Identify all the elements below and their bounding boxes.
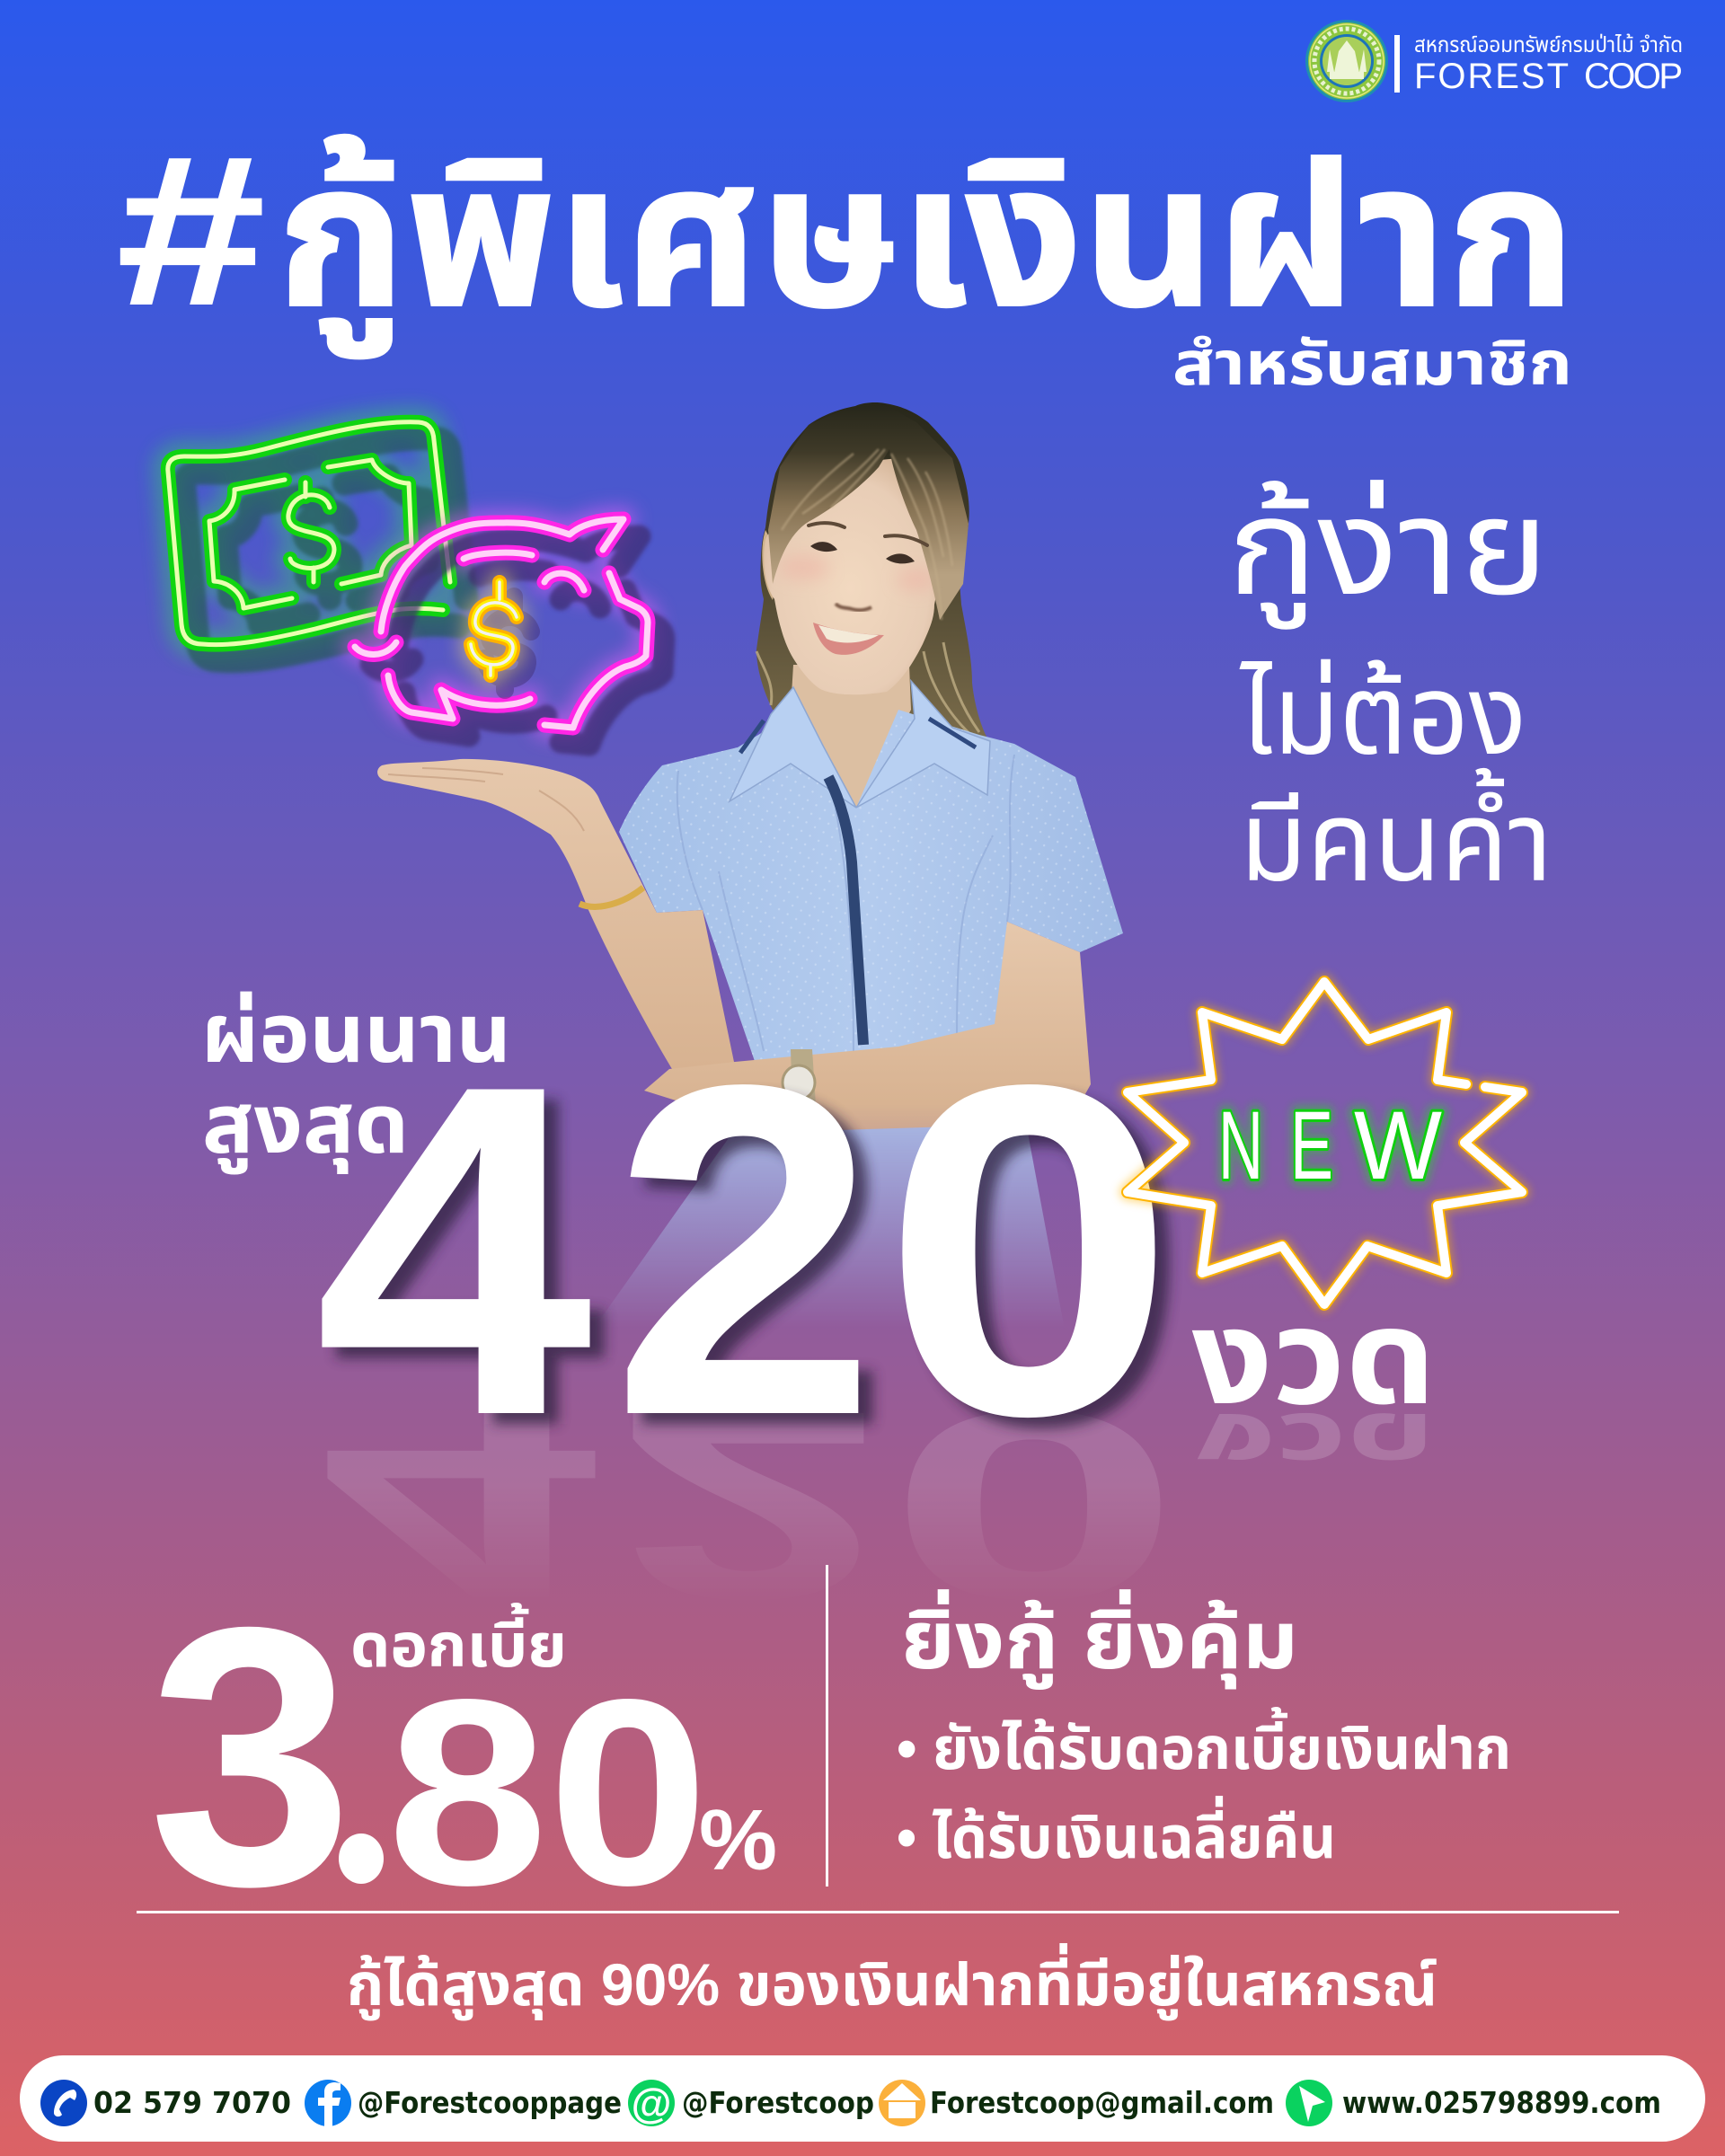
text: email: Forestcoop@gmail.com: [930, 2085, 1274, 2120]
eyes and brows: [809, 523, 927, 563]
reflection of 420: 0: [887, 1356, 1182, 1656]
logo wordmark: [1414, 57, 1683, 96]
pill background: [20, 2055, 1705, 2142]
icon: neon banknote: [168, 422, 466, 661]
face: [764, 458, 937, 694]
big number 420 shadow: 2: [625, 998, 892, 1524]
text: easy loan: กู้ง่าย: [1227, 472, 1549, 630]
arm with raised hand: [377, 759, 735, 1100]
NEW neon glow: E: [1290, 1091, 1333, 1199]
vertical divider: [826, 1565, 828, 1886]
title: #: [117, 112, 265, 349]
hair strands: [782, 449, 952, 620]
interest rate 3.80%: [148, 1551, 777, 1962]
logo thai name: สหกรณ์ออมทรัพย์กรมป่าไม้ จำกัด: [1414, 33, 1683, 57]
big number 420: 4: [314, 987, 596, 1513]
logo wordmark: COOP: [1584, 57, 1683, 96]
NEW neon tube: [1218, 1091, 1442, 1199]
shirt: [619, 710, 1123, 1069]
subtitle: สำหรับสมาชิก: [1172, 330, 1572, 398]
banknote neon core: [168, 422, 450, 645]
folded forearm: [644, 922, 1091, 1130]
blush: [779, 555, 936, 591]
bangs: [768, 404, 969, 620]
back hair: [756, 402, 987, 746]
piggy shadow: [371, 536, 664, 745]
text: phone number: 02 579 7070: [93, 2085, 291, 2120]
icon: line at sign: @: [632, 2080, 671, 2126]
piggy neon core: [355, 519, 648, 728]
big number 420: [314, 987, 1177, 1514]
shirt collar: [730, 681, 990, 808]
banknote neon tube: [168, 422, 450, 645]
icon: email house: [879, 2080, 925, 2126]
horizontal divider: [137, 1911, 1619, 1913]
ear: [762, 530, 780, 600]
icon: coop seal: [1305, 20, 1388, 102]
reflection of installments word: งวด: [1197, 1396, 1435, 1488]
reflection of 420: [320, 1356, 1182, 1656]
text: longest installment line 1: ผ่อนนาน: [201, 988, 511, 1080]
icon: website cursor: [1286, 2080, 1332, 2126]
NEW label: N: [1218, 1091, 1263, 1199]
rate digit 3: 3: [148, 1551, 353, 1962]
text: benefit one: • ยังได้รับดอกเบี้ยเงินฝาก: [897, 1707, 1511, 1781]
skirt: [609, 1127, 1060, 1310]
NEW neon tube: E: [1290, 1091, 1333, 1199]
NEW label: E: [1290, 1091, 1333, 1199]
shirt placket: [828, 777, 863, 1045]
rate decimal point: [339, 1833, 384, 1884]
star tube: [1128, 982, 1522, 1304]
text: installments: งวด: [1191, 1284, 1436, 1432]
collar stripes: [740, 719, 976, 753]
text: benefit two: • ได้รับเงินเฉลี่ยคืน: [897, 1796, 1336, 1870]
big number 420 shadow: [329, 998, 1191, 1524]
hair highlights: [756, 642, 979, 738]
contact pill: [20, 2055, 1705, 2142]
big number 420 shadow: 4: [329, 998, 610, 1524]
rate digits 80: 80: [387, 1645, 709, 1940]
title: กู้พิเศษเงินฝาก: [277, 124, 1576, 359]
watch: [783, 1049, 816, 1105]
finger and palm lines: [388, 768, 584, 831]
NEW neon glow: N: [1218, 1091, 1263, 1199]
neon dollar sign: [471, 582, 531, 690]
text: website: www.025798899.com: [1342, 2085, 1661, 2120]
big number 420 shadow: 0: [896, 998, 1191, 1524]
piggy neon tube: [355, 519, 648, 728]
banknote wash: [168, 422, 450, 645]
text: interest label: ดอกเบี้ย: [350, 1603, 567, 1680]
piggy glow: [355, 519, 648, 728]
banknote shadow: [184, 438, 466, 661]
big number 420: 2: [611, 987, 878, 1514]
big number 420: 0: [881, 987, 1177, 1514]
person: presenter in blue shirt: [377, 402, 1123, 1330]
neck: [791, 665, 911, 813]
NEW label: W: [1354, 1091, 1442, 1199]
rate percent sign: %: [699, 1791, 777, 1888]
star glow: [1128, 982, 1522, 1304]
icon: phone: [40, 2080, 87, 2126]
text: benefits heading: ยิ่งกู้ ยิ่งคุ้ม: [901, 1588, 1298, 1690]
logo: Forest Coop: [1305, 20, 1683, 102]
shirt seams: [677, 755, 1014, 1051]
star core: [1128, 982, 1522, 1304]
icon: facebook: [305, 2080, 351, 2126]
smile: [813, 623, 884, 655]
NEW neon tube: W: [1354, 1091, 1442, 1199]
icon: neon piggy bank: [355, 519, 664, 745]
text: facebook page: @Forestcooppage: [358, 2085, 622, 2120]
text: loan limit: กู้ได้สูงสุด 90% ของเงินฝากที่มีอยู่ในสหกรณ์: [347, 1943, 1438, 2020]
badge: neon NEW star: [1128, 982, 1522, 1304]
reflection of 420: 2: [616, 1356, 883, 1656]
text: no guarantor line 1: ไม่ต้อง: [1239, 654, 1526, 778]
text: no guarantor line 2: มีคนค้ำ: [1240, 767, 1552, 905]
reflection of 420: 4: [320, 1356, 601, 1656]
NEW neon glow: [1218, 1091, 1442, 1199]
logo wordmark: FOREST: [1414, 57, 1569, 96]
text: line id: @Forestcoop: [682, 2085, 874, 2120]
bracelet: [579, 888, 643, 906]
logo divider bar: [1394, 35, 1400, 93]
NEW neon glow: W: [1354, 1091, 1442, 1199]
NEW neon tube: N: [1218, 1091, 1263, 1199]
NEW label: [1218, 1091, 1442, 1199]
text: longest installment line 2: สูงสุด: [202, 1079, 409, 1175]
nose: [836, 604, 871, 610]
